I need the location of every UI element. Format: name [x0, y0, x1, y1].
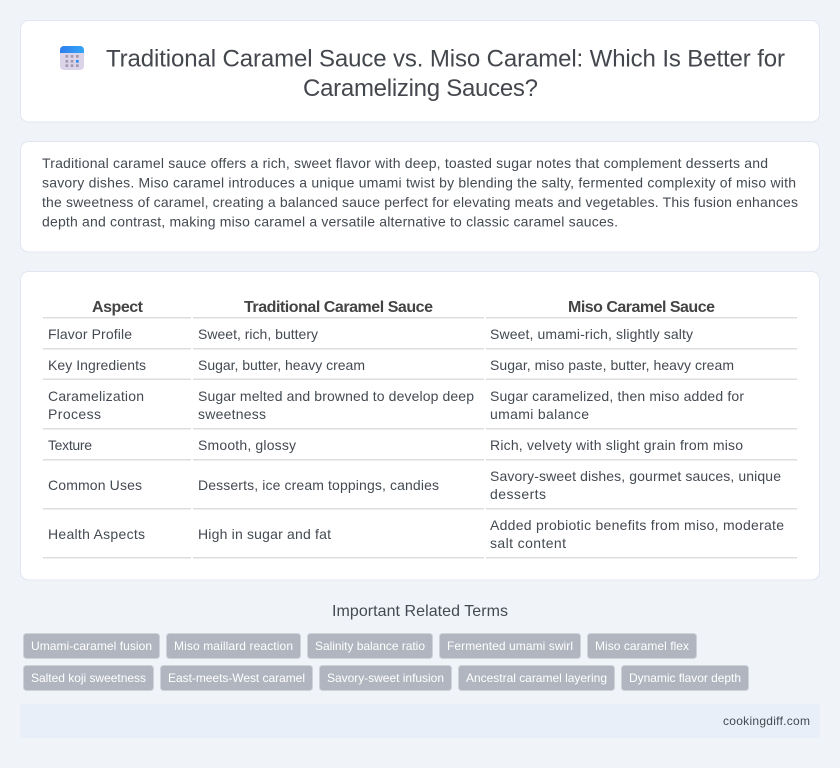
tag [458, 666, 614, 690]
panel: comparison table [20, 272, 820, 580]
panel: introduction text: depth and contrast, making miso caramel a versatile alternative to classic caramel sauces. [42, 214, 618, 230]
tag: Ancestral caramel layering [466, 671, 607, 685]
row: key ingredients: Sugar, butter, heavy cream [198, 357, 365, 373]
row: texture: Texture [48, 437, 92, 453]
tag: Salinity balance ratio [315, 639, 425, 653]
row: flavor profile [43, 326, 797, 350]
icon: calendar [60, 46, 84, 70]
row: health aspects [43, 517, 797, 558]
row: caramelization process: sweetness [198, 406, 266, 422]
row: caramelization process: Sugar caramelized, then miso added for [490, 388, 744, 404]
row: flavor profile: Sweet, rich, buttery [198, 326, 318, 342]
row: common uses [43, 468, 797, 510]
panel: introduction text: savory dishes. Miso caramel introduces a unique umami twist by blending the salty, fermented complexity of miso with [42, 174, 796, 190]
footer bar: cookingdiff.com [723, 714, 810, 728]
tag [320, 666, 452, 690]
row: texture [43, 437, 797, 460]
tag: Umami-caramel fusion [31, 639, 152, 653]
tag: Miso caramel flex [595, 639, 689, 653]
title: Traditional Caramel Sauce vs. Miso Caramel: Which Is Better for [106, 46, 785, 72]
table header row: Aspect [92, 299, 144, 316]
row: health aspects: Added probiotic benefits from miso, moderate [490, 517, 784, 533]
tag [588, 634, 696, 658]
row: caramelization process: Caramelization [48, 388, 144, 404]
footer bar [20, 704, 820, 738]
row: flavor profile: Sweet, umami-rich, slightly salty [490, 326, 693, 342]
tags: related terms [24, 634, 748, 690]
row: common uses: desserts [490, 486, 546, 502]
row: caramelization process [43, 388, 797, 430]
tag: Fermented umami swirl [447, 639, 573, 653]
title [106, 46, 785, 102]
row: texture: Smooth, glossy [198, 437, 296, 453]
row: common uses: Desserts, ice cream toppings, candies [198, 477, 439, 493]
row: key ingredients [43, 357, 797, 380]
tag [160, 666, 312, 690]
title: Caramelizing Sauces? [303, 75, 538, 102]
tag [24, 666, 154, 690]
tag: Salted koji sweetness [31, 671, 146, 685]
row: health aspects: High in sugar and fat [198, 526, 331, 542]
row: caramelization process: Process [48, 406, 101, 422]
tag: East-meets-West caramel [168, 671, 305, 685]
tag: Miso maillard reaction [174, 639, 293, 653]
tag [440, 634, 580, 658]
row: key ingredients: Sugar, miso paste, butter, heavy cream [490, 357, 734, 373]
row: health aspects: Health Aspects [48, 526, 145, 542]
row: key ingredients: Key Ingredients [48, 357, 146, 373]
tag [166, 634, 300, 658]
row: caramelization process: Sugar melted and browned to develop deep [198, 388, 474, 404]
table header row: Miso Caramel Sauce [568, 299, 715, 316]
row: flavor profile: Flavor Profile [48, 326, 132, 342]
heading: important related terms: Important Related Terms [332, 603, 508, 620]
row: common uses: Savory-sweet dishes, gourmet sauces, unique [490, 468, 781, 484]
tag [308, 634, 432, 658]
row: caramelization process: umami balance [490, 406, 589, 422]
table header row: Traditional Caramel Sauce [244, 299, 433, 316]
tag [24, 634, 160, 658]
tag: Savory-sweet infusion [327, 671, 444, 685]
panel: introduction text: the sweetness of caramel, creating a balanced sauce perfect for elevating meats and vegetables. This fusion enhances [42, 194, 798, 210]
panel: title header [20, 20, 820, 122]
row: texture: Rich, velvety with slight grain from miso [490, 437, 743, 453]
tag: Dynamic flavor depth [629, 671, 741, 685]
tag [622, 666, 748, 690]
panel: introduction text [20, 142, 820, 252]
table header row [43, 299, 797, 318]
row: common uses: Common Uses [48, 477, 142, 493]
panel: introduction text: Traditional caramel sauce offers a rich, sweet flavor with deep, toasted sugar notes that complement desserts and [42, 155, 768, 171]
row: health aspects: salt content [490, 535, 566, 551]
